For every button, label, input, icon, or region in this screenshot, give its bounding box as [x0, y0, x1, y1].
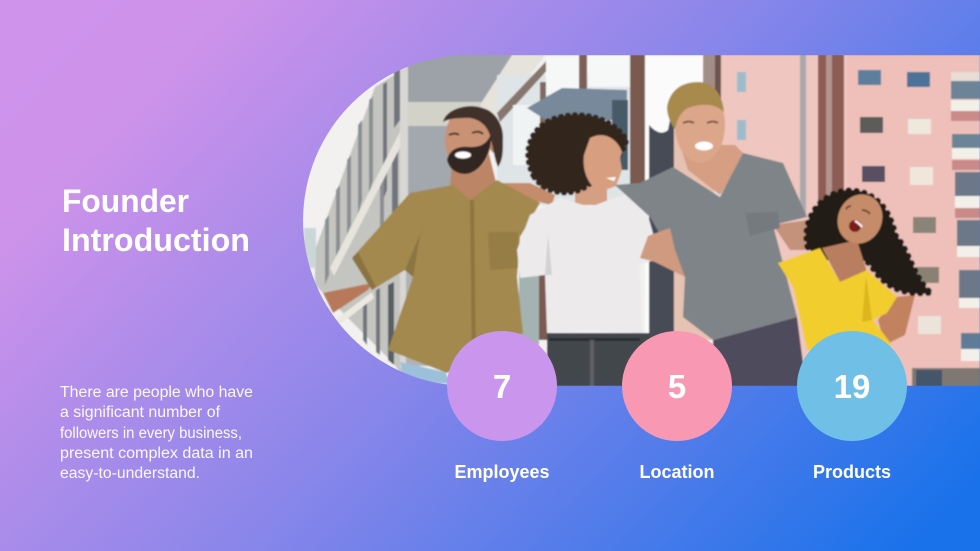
pink building: [721, 55, 980, 386]
title: Introduction: [62, 222, 250, 258]
stat: 5 Location: Location: [640, 462, 714, 482]
title: [62, 183, 250, 258]
person: man in olive shirt: [323, 106, 555, 384]
stat: 19 Products: [797, 331, 907, 482]
body text: There are people who have: [60, 384, 253, 401]
body text: [60, 384, 253, 482]
stat: 5 Location: 5: [668, 368, 686, 405]
body text: followers in every business,: [60, 425, 242, 442]
photo: four friends laughing: [300, 55, 980, 386]
person: man in grey T-shirt: [615, 82, 808, 386]
person: woman in yellow T-shirt: [778, 188, 932, 350]
stat: 5 Location: [622, 331, 732, 482]
left building facade: [304, 66, 408, 386]
body text: present complex data in an: [60, 445, 253, 462]
stat: 7 Employees: 7: [493, 368, 511, 405]
stat: 19 Products: Products: [813, 462, 891, 482]
centre concrete block: [400, 55, 545, 368]
person: woman in white T-shirt: [517, 115, 660, 386]
glass windows with brown frames: [497, 55, 720, 345]
body text: easy-to-understand.: [60, 465, 200, 482]
title: Founder: [62, 183, 189, 219]
stat: 7 Employees: Employees: [454, 462, 550, 482]
stat: 19 Products: 19: [834, 368, 870, 405]
body text: a significant number of: [60, 404, 221, 421]
stat: 7 Employees: [447, 331, 557, 482]
dark building and sky: [644, 55, 722, 340]
